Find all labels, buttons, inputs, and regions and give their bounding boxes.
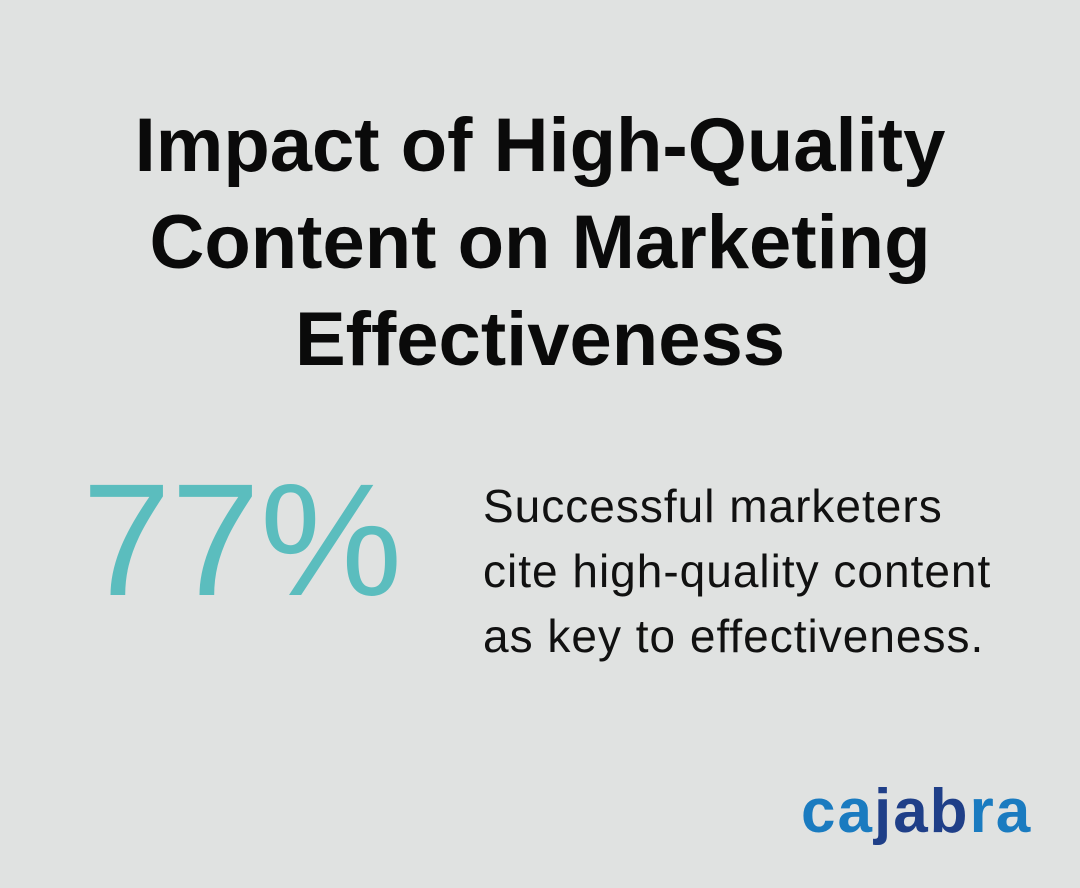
description text: as key to effectiveness. — [483, 610, 984, 662]
title: Content on Marketing — [149, 200, 931, 285]
title: Effectiveness — [295, 297, 785, 382]
description text: Successful marketers — [483, 480, 943, 532]
logo: cajabra: cajabra — [801, 777, 1032, 846]
title — [135, 103, 945, 382]
title: Impact of High-Quality — [135, 103, 945, 188]
description text — [483, 480, 991, 662]
description text: cite high-quality content — [483, 545, 991, 597]
statistic: 77%: 77% — [82, 450, 402, 629]
